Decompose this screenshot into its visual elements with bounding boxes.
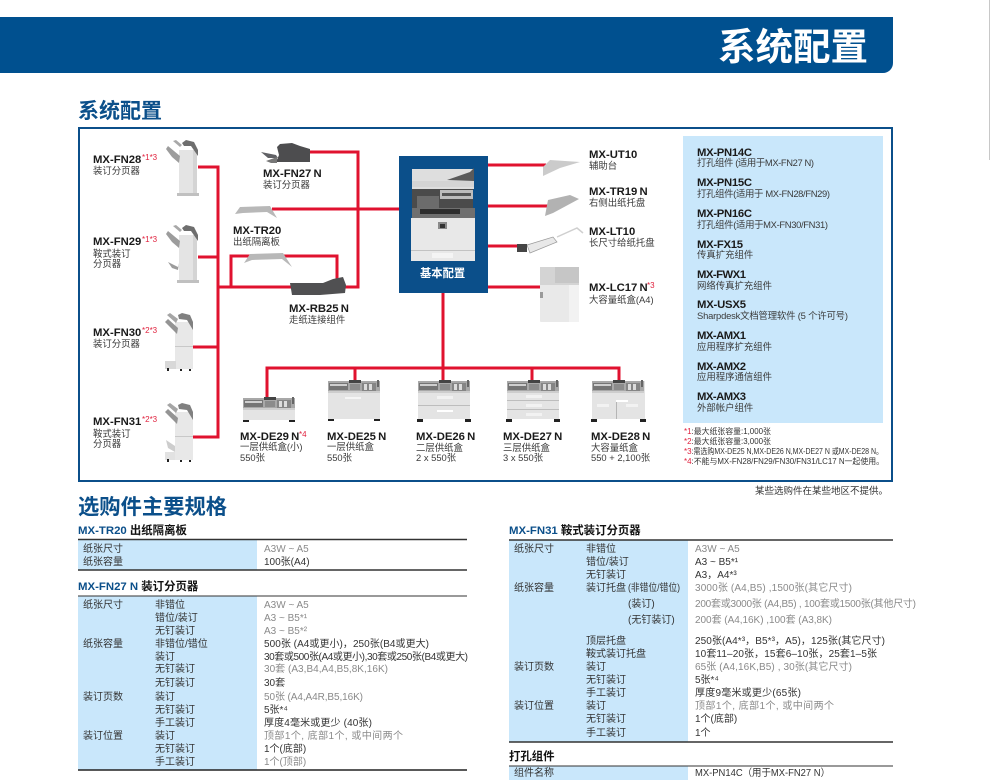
spec table: punch module: MX-PN14C（用于MX-FN27 N） (695, 767, 830, 779)
spec table: MX-FN27 N: 30套或500张(A4或更小),30套或250张(B4或更大) (264, 650, 468, 663)
spec table: MX-FN31: A3W ~ A5 (695, 544, 740, 555)
option: MX-TR19 N: 右侧出纸托盘 (589, 197, 645, 208)
spec table: MX-TR20: 100张(A4) (264, 556, 310, 568)
spec table: MX-FN27 N: 错位/装订 (155, 611, 198, 624)
option: MX-DE29 N: 550张 (240, 452, 266, 463)
spec table: MX-FN31: 装订页数 (514, 660, 554, 673)
spec table: MX-FN31: (无钉装订) (628, 613, 675, 626)
option: MX-DE25 N: 一层供纸盒 (327, 441, 375, 452)
option: MX-TR20 lower tray (244, 253, 292, 267)
option: MX-FN30: *2*3 (142, 326, 158, 335)
option: MX-DE27 N: 3 x 550张 (503, 452, 544, 463)
option: MX-FN28: *1*3 (142, 153, 158, 162)
heading: system configuration: 系统配置 (78, 99, 162, 123)
option: MX-UT10: 辅助台 (589, 160, 617, 171)
spec table: MX-FN31: 顶部1个, 底部1个, 或中间两个 (695, 699, 834, 712)
panel: system diagram (79, 128, 892, 481)
option: MX-FN29: *1*3 (142, 235, 158, 244)
spec table: punch module: 打孔组件 (509, 749, 555, 763)
panel: accessories list: MX-AMX2 (697, 361, 746, 373)
spec table: MX-FN27 N: A3W ~ A5 (264, 600, 309, 611)
spec table: MX-TR20: A3W ~ A5 (264, 544, 309, 555)
spec table: MX-FN31: 200套或3000张 (A4,B5) , 100套或1500张(其他尺寸) (695, 597, 916, 610)
spec table: MX-FN27 N: 无钉装订 (155, 742, 195, 755)
option: MX-FN27 N: MX-FN27 N (263, 168, 322, 180)
option: MX-TR20 upper: 出纸隔离板 (233, 236, 281, 247)
option: MX-DE29 N: 一层供纸盒(小) (240, 441, 302, 452)
option: MX-DE27 N: MX-DE27 N (503, 431, 562, 443)
spec table: MX-FN31: 装订托盘 (586, 581, 626, 594)
panel: accessories list: 网络传真扩充组件 (697, 280, 772, 291)
option: MX-FN29 (93, 225, 199, 283)
option: MX-DE25 N: MX-DE25 N (327, 431, 386, 443)
footnotes: :最大纸张容量:1,000张 (692, 426, 771, 436)
panel: accessories list (683, 136, 883, 423)
option: MX-RB25 N: 走纸连接组件 (289, 314, 345, 325)
option: MX-LT10: 长尺寸给纸托盘 (589, 237, 655, 248)
footnotes (684, 426, 884, 466)
option: MX-DE26 N: 2 x 550张 (416, 452, 457, 463)
spec table: MX-FN27 N: 5张*⁴ (264, 704, 288, 716)
panel: accessories list: MX-PN15C (697, 177, 752, 189)
spec table: MX-FN27 N: 顶部1个, 底部1个, 或中间两个 (264, 729, 403, 742)
option: MX-FN27 N: 装订分页器 (263, 179, 311, 190)
option: MX-DE28 N: 550 + 2,100张 (591, 452, 651, 463)
spec table: MX-FN31 (509, 523, 916, 742)
spec table: MX-TR20: MX-TR20 出纸隔离板 (78, 523, 187, 537)
option: MX-UT10 (543, 149, 637, 176)
spec table: MX-FN31: (装订) (628, 597, 655, 610)
spec table: MX-FN27 N: 1个(顶部) (264, 755, 306, 768)
spec table: MX-FN31: 10套11–20张，15套6–10张，25套1–5张 (695, 647, 877, 660)
spec table: MX-TR20: 纸张容量 (83, 555, 123, 568)
spec table: MX-FN27 N: 非错位/错位 (155, 637, 208, 650)
panel: accessories list: Sharpdesk文档管理软件 (5 个许可号) (697, 310, 848, 321)
option: MX-DE28 N: 大容量纸盒 (591, 442, 639, 453)
spec table: MX-FN27 N: 无钉装订 (155, 676, 195, 689)
option: MX-RB25 N: MX-RB25 N (289, 303, 349, 315)
option: MX-FN31: MX-FN31 (93, 416, 141, 428)
option: MX-DE28 N: MX-DE28 N (591, 431, 650, 443)
base configuration unit (399, 156, 488, 293)
option: MX-DE26 N: MX-DE26 N (416, 431, 475, 443)
header banner (0, 17, 893, 73)
option: MX-DE29 N: MX-DE29 N (240, 431, 299, 443)
panel: accessories list: MX-PN14C (697, 147, 752, 159)
spec table: MX-FN31: (非错位/错位) (628, 581, 680, 594)
footnotes: *4 (684, 457, 692, 466)
option: MX-DE26 N (416, 380, 475, 463)
header banner: 系统配置 (718, 26, 868, 68)
panel: accessories list: MX-FWX1 (697, 269, 746, 281)
option: MX-LC17 N: 大容量纸盒(A4) (589, 294, 654, 305)
option: MX-FN30: 装订分页器 (93, 338, 141, 349)
spec table: MX-FN27 N: 装订 (155, 650, 175, 663)
spec table: MX-FN31: 纸张容量 (514, 581, 554, 594)
spec table: MX-FN27 N: 无钉装订 (155, 662, 195, 675)
spec table: MX-FN31: MX-FN31 鞍式装订分页器 (509, 523, 641, 537)
icon: copier (411, 168, 475, 261)
spec table: MX-FN27 N: 装订位置 (83, 729, 123, 742)
footnotes: :需选购MX-DE25 N,MX-DE26 N,MX-DE27 N 或MX-DE28 N。 (692, 446, 883, 456)
panel: accessories list: 传真扩充组件 (697, 249, 753, 260)
option: MX-UT10: MX-UT10 (589, 149, 637, 161)
spec table: MX-TR20 (78, 523, 467, 570)
option: MX-FN28 (93, 140, 199, 196)
spec table: MX-FN27 N: A3 ~ B5*² (264, 626, 308, 637)
spec table: MX-FN27 N: MX-FN27 N 装订分页器 (78, 579, 199, 593)
option: MX-FN31: 鞍式装订 (93, 428, 131, 439)
footnotes: *1 (684, 427, 692, 436)
spec table: MX-FN31: 无钉装订 (586, 712, 626, 725)
option: MX-LT10 (517, 226, 655, 253)
option: MX-LC17 N: *3 (647, 281, 655, 290)
option: MX-LT10: MX-LT10 (589, 226, 635, 238)
spec table: MX-FN31: 手工装订 (586, 686, 626, 699)
spec table: MX-FN27 N: 装订 (155, 729, 175, 742)
spec table: MX-FN27 N: 厚度4毫米或更少 (40张) (264, 716, 372, 729)
option: MX-DE27 N (503, 380, 562, 463)
spec table: MX-FN31: 顶层托盘 (586, 634, 626, 647)
spec table: MX-FN31: 1个(底部) (695, 712, 737, 725)
option: MX-DE27 N: 三层供纸盒 (503, 442, 551, 453)
spec table: MX-FN27 N: 30套 (264, 676, 285, 689)
spec table: MX-FN27 N: 50张 (A4,A4R,B5,16K) (264, 691, 363, 703)
option: MX-FN28: 装订分页器 (93, 165, 141, 176)
option: MX-DE29 N: *4 (299, 430, 307, 439)
spec table: MX-FN31: 200套 (A4,16K) ,100套 (A3,8K) (695, 613, 832, 626)
spec table: MX-FN31: 250张(A4*³，B5*³，A5)，125张(其它尺寸) (695, 634, 885, 647)
spec table: MX-FN27 N: 装订页数 (83, 690, 123, 703)
option: MX-FN30: MX-FN30 (93, 327, 141, 339)
option: MX-DE25 N: 550张 (327, 452, 353, 463)
connector lines (193, 152, 619, 437)
panel: accessories list: MX-AMX1 (697, 330, 746, 342)
base configuration unit: 基本配置 (420, 266, 465, 280)
panel: accessories list: MX-USX5 (697, 299, 746, 311)
option: MX-FN29: MX-FN29 (93, 236, 141, 248)
footnotes: :不能与MX-FN28/FN29/FN30/FN31/LC17 N一起使用。 (692, 456, 884, 466)
spec table: MX-FN31: 1个 (695, 727, 711, 739)
option: MX-FN29: 分页器 (93, 258, 122, 269)
spec table: MX-FN31: 无钉装订 (586, 673, 626, 686)
spec table: punch module: 组件名称 (514, 766, 554, 779)
option: MX-TR20 upper: MX-TR20 (233, 225, 281, 237)
availability note: 某些选购件在某些地区不提供。 (755, 485, 888, 497)
spec table: MX-FN27 N: 30套 (A3,B4,A4,B5,8K,16K) (264, 662, 388, 675)
option: MX-RB25 N (289, 277, 349, 325)
spec table: MX-FN27 N: 装订 (155, 690, 175, 703)
spec table: MX-FN31: 65张 (A4,16K,B5) , 30张(其它尺寸) (695, 660, 852, 673)
panel: accessories list: 打孔组件(适用于 MX-FN28/FN29) (697, 188, 830, 199)
option: MX-DE28 N (591, 380, 651, 463)
spec table: MX-FN27 N: 纸张容量 (83, 637, 123, 650)
option: MX-TR19 N: MX-TR19 N (589, 186, 648, 198)
footnotes: *3 (684, 447, 692, 456)
spec table: MX-FN31: 装订 (586, 699, 606, 712)
spec table: punch module (509, 749, 893, 780)
panel: accessories list: 打孔组件 (适用于MX-FN27 N) (697, 157, 814, 168)
page edge line (989, 0, 990, 160)
option: MX-DE26 N: 二层供纸盒 (416, 442, 464, 453)
spec table: MX-FN31: 鞍式装订托盘 (586, 647, 646, 660)
spec table: MX-FN27 N: 手工装订 (155, 755, 195, 768)
option: MX-FN30 (93, 313, 193, 371)
option: MX-FN28: MX-FN28 (93, 154, 141, 166)
option: MX-DE25 N (327, 380, 386, 463)
spec table: MX-FN27 N: 纸张尺寸 (83, 598, 123, 611)
option: MX-FN27 N (261, 143, 322, 190)
option: MX-TR20 upper (233, 206, 281, 247)
spec table: MX-TR20: 纸张尺寸 (83, 542, 123, 555)
option: MX-FN29: 鞍式装订 (93, 248, 131, 259)
heading: main specs: 选购件主要规格 (78, 495, 227, 519)
spec table: MX-FN27 N: A3 ~ B5*¹ (264, 613, 308, 624)
panel: accessories list: 外部帐户组件 (697, 402, 753, 413)
spec table: MX-FN27 N: 非错位 (155, 598, 185, 611)
option: MX-LC17 N: MX-LC17 N (589, 282, 648, 294)
spec table: MX-FN27 N: 无钉装订 (155, 624, 195, 637)
spec table: MX-FN27 N: 无钉装订 (155, 703, 195, 716)
panel: accessories list: MX-FX15 (697, 239, 743, 251)
spec table: MX-FN31: 手工装订 (586, 726, 626, 739)
footnotes: *2 (684, 437, 692, 446)
spec table: MX-FN31: 错位/装订 (586, 555, 629, 568)
spec table: MX-FN31: 装订位置 (514, 699, 554, 712)
option: MX-FN31: *2*3 (142, 415, 158, 424)
spec table: MX-FN31: 无钉装订 (586, 568, 626, 581)
option: MX-FN31: 分页器 (93, 438, 122, 449)
panel: accessories list: 应用程序扩充组件 (697, 341, 772, 352)
panel: accessories list: MX-PN16C (697, 208, 752, 220)
spec table: MX-FN31: 3000张 (A4,B5) ,1500张(其它尺寸) (695, 581, 852, 594)
spec table: MX-FN27 N: 1个(底部) (264, 742, 306, 755)
panel: accessories list: MX-AMX3 (697, 391, 746, 403)
spec table: MX-FN27 N: 手工装订 (155, 716, 195, 729)
panel: accessories list: 打孔组件(适用于MX-FN30/FN31) (697, 219, 828, 230)
option: MX-DE29 N (240, 397, 307, 463)
spec table: MX-FN31: A3 ~ B5*¹ (695, 557, 739, 568)
option: MX-LC17 N (540, 267, 655, 322)
option: MX-TR19 N (545, 186, 648, 216)
spec table: MX-FN27 N: 500张 (A4或更小)，250张(B4或更大) (264, 637, 429, 650)
option: MX-FN31 (93, 403, 193, 462)
panel: accessories list: 应用程序通信组件 (697, 371, 772, 382)
spec table: MX-FN31: 纸张尺寸 (514, 542, 554, 555)
spec table: MX-FN27 N (78, 579, 468, 770)
spec table: MX-FN31: A3，A4*³ (695, 570, 737, 581)
footnotes: :最大纸张容量:3,000张 (692, 436, 771, 446)
spec table: MX-FN31: 5张*⁴ (695, 674, 719, 686)
spec table: MX-FN31: 非错位 (586, 542, 616, 555)
spec table: MX-FN31: 厚度9毫米或更少(65张) (695, 686, 801, 699)
spec table: MX-FN31: 装订 (586, 660, 606, 673)
